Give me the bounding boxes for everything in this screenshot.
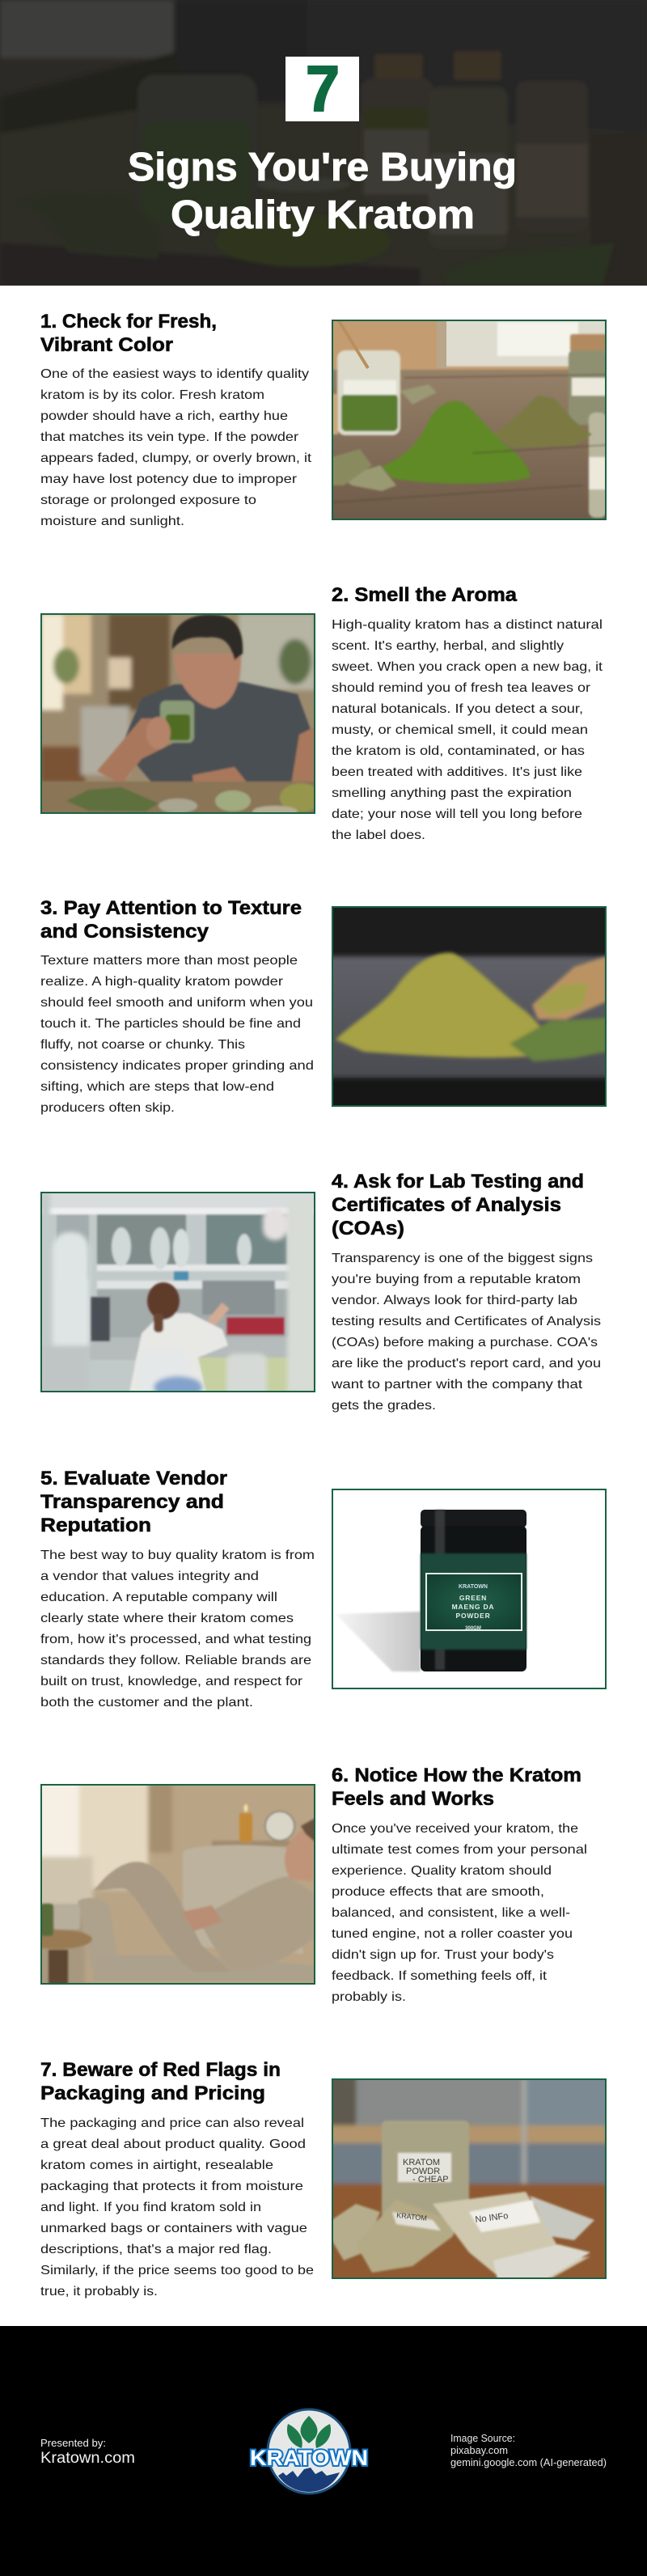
body text 3: consistency indicates proper grinding and (40, 1059, 314, 1073)
body text 2: been treated with additives. It's just like (332, 765, 582, 779)
heading 6: 6. Notice How the Kratom (332, 1765, 581, 1786)
section 4: lab testing (40, 1171, 601, 1413)
body text 1: storage or prolonged exposure to (40, 494, 256, 507)
body text 5: clearly state where their kratom comes (40, 1612, 294, 1625)
body text 1: may have lost potency due to improper (40, 472, 298, 486)
body text 1: appears faded, clumpy, or overly brown, it (40, 451, 312, 465)
heading 6: Feels and Works (332, 1788, 494, 1810)
body text 1: moisture and sunlight. (40, 515, 184, 528)
header background photo (0, 0, 647, 286)
image: cheap kratom bags: POWDR (406, 2167, 440, 2176)
heading 4: Certificates of Analysis (332, 1194, 561, 1216)
body text 7: true, it probably is. (40, 2285, 158, 2298)
body text 7: and light. If you find kratom sold in (40, 2201, 261, 2214)
body text 4: Transparency is one of the biggest signs (332, 1252, 593, 1265)
body text 4: vendor. Always look for third-party lab (332, 1294, 577, 1307)
body text 2: High-quality kratom has a distinct natural (332, 618, 603, 632)
section 6: effects (21, 1765, 587, 2004)
heading 5: Reputation (40, 1515, 151, 1536)
image: product jar: KRATOWN (459, 1584, 488, 1590)
body text 7: packaging that protects it from moisture (40, 2180, 303, 2193)
body text 6: tuned engine, not a roller coaster you (332, 1927, 573, 1941)
header banner (0, 0, 647, 286)
body text 4 (331, 1252, 601, 1413)
logo (250, 2409, 368, 2493)
body text 7: descriptions, that's a major red flag. (40, 2243, 272, 2256)
body text 3 (40, 954, 314, 1115)
image source credits: Image Source: (450, 2432, 515, 2444)
bottles (374, 54, 423, 80)
number badge: 7 (306, 53, 340, 125)
body text 1: powder should have a rich, earthy hue (40, 409, 288, 423)
body text 6 (332, 1822, 587, 2004)
body text 5: The best way to buy quality kratom is from (40, 1549, 315, 1562)
body text 6: probably is. (332, 1990, 406, 2004)
image: laboratory (40, 1192, 315, 1402)
heading 7: Packaging and Pricing (40, 2082, 265, 2104)
heading 3 (40, 897, 302, 943)
heading 5: 5. Evaluate Vendor (40, 1468, 227, 1489)
section 2: smell (40, 584, 603, 842)
body text 7: kratom comes in airtight, resealable (40, 2159, 273, 2172)
presented by: Kratown.com (40, 2450, 135, 2467)
image source credits (450, 2432, 607, 2468)
image source credits: pixabay.com (450, 2444, 508, 2456)
body text 6: balanced, and consistent, like a well- (332, 1906, 570, 1920)
body text 2: the label does. (332, 828, 425, 842)
body text 6: Once you've received your kratom, the (332, 1822, 578, 1836)
body text 4: want to partner with the company that (331, 1378, 583, 1392)
image: product jar: MAENG DA (452, 1603, 494, 1611)
heading 5: Transparency and (40, 1491, 224, 1513)
body text 6: ultimate test comes from your personal (332, 1843, 587, 1857)
body text 4: (COAs) before making a purchase. COA's (332, 1336, 598, 1349)
presented by: Presented by: (40, 2437, 106, 2449)
body text 7: The packaging and price can also reveal (40, 2116, 304, 2130)
jar (137, 74, 257, 224)
body text 4: testing results and Certificates of Analysis (332, 1315, 601, 1328)
heading 4: 4. Ask for Lab Testing and (332, 1171, 584, 1193)
body text 1: One of the easiest ways to identify quality (40, 367, 309, 381)
section 7: red flags (40, 2059, 611, 2298)
heading 1: Vibrant Color (40, 334, 173, 356)
body text 1: kratom is by its color. Fresh kratom (40, 388, 264, 402)
image: product jar: POWDER (455, 1612, 491, 1620)
body text 3: touch it. The particles should be fine and (40, 1017, 301, 1031)
number badge (285, 53, 359, 125)
body text 3: producers often skip. (40, 1101, 175, 1115)
body text 7: a great deal about product quality. Good (40, 2137, 306, 2151)
image: product jar (332, 1489, 607, 1689)
body text 6: didn't sign up for. Trust your body's (332, 1948, 554, 1962)
body text 4: gets the grades. (332, 1399, 436, 1413)
heading 5 (40, 1468, 227, 1536)
body text 2: natural botanicals. If you detect a sour, (332, 702, 583, 716)
body text 6: feedback. If something feels off, it (332, 1969, 548, 1983)
section 3: texture (40, 897, 615, 1115)
logo: KRATOWN (250, 2446, 368, 2470)
heading 1: 1. Check for Fresh, (40, 311, 217, 333)
heading 3: and Consistency (40, 921, 209, 943)
body text 5: from, how it's processed, and what testing (40, 1633, 311, 1646)
image source credits: gemini.google.com (AI-generated) (450, 2456, 607, 2468)
image: cheap kratom bags: KRATOM (403, 2158, 440, 2167)
body text 5: a vendor that values integrity and (40, 1570, 259, 1583)
body text 6: experience. Quality kratom should (332, 1864, 552, 1878)
heading 3: 3. Pay Attention to Texture (40, 897, 302, 919)
body text 4: are like the product's report card, and you (332, 1357, 601, 1371)
body text 2: musty, or chemical smell, it could mean (332, 723, 588, 737)
heading 1 (40, 311, 217, 356)
body text 7: Similarly, if the price seems too good to be (40, 2264, 314, 2277)
heading 7 (40, 2059, 281, 2104)
body text 1: that matches its vein type. If the powder (40, 430, 299, 444)
image: product jar: GREEN (459, 1594, 487, 1602)
image: product jar: 300GM (465, 1626, 481, 1631)
heading 2: 2. Smell the Aroma (332, 584, 518, 606)
title (128, 146, 517, 237)
image: cheap kratom bags: KRATOM (396, 2211, 427, 2222)
image: green powder piles on table (332, 320, 607, 520)
title: Signs You're Buying (128, 146, 517, 189)
body text 2: scent. It's earthy, herbal, and slightly (332, 639, 564, 653)
body text 5: built on trust, knowledge, and respect for (40, 1675, 303, 1688)
body text 3: Texture matters more than most people (40, 954, 298, 968)
body text 2: date; your nose will tell you long before (332, 807, 582, 821)
section 1: check color (40, 311, 607, 528)
heading 4: (COAs) (332, 1218, 404, 1239)
image: cheap kratom bags: - CHEAP (412, 2175, 449, 2184)
title: Quality Kratom (171, 193, 475, 237)
body text 2: sweet. When you crack open a new bag, it (332, 660, 603, 674)
body text 5 (40, 1549, 315, 1710)
body text 3: should feel smooth and uniform when you (40, 996, 313, 1010)
body text 3: sifting, which are steps that low-end (40, 1080, 274, 1094)
body text 4: you're buying from a reputable kratom (332, 1273, 581, 1286)
heading 7: 7. Beware of Red Flags in (40, 2059, 281, 2081)
image: powder on slate (324, 898, 615, 1115)
body text 2 (332, 618, 603, 842)
body text 7: unmarked bags or containers with vague (40, 2222, 307, 2235)
body text 1 (40, 367, 312, 528)
body text 2: smelling anything past the expiration (332, 786, 572, 800)
body text 2: should remind you of fresh tea leaves or (332, 681, 591, 695)
body text 5: education. A reputable company will (40, 1591, 277, 1604)
footer (0, 2326, 647, 2576)
heading 6 (332, 1765, 581, 1810)
body text 2: the kratom is old, contaminated, or has (332, 744, 585, 758)
body text 6: produce effects that are smooth, (332, 1885, 544, 1899)
body text 3: fluffy, not coarse or chunky. This (40, 1038, 245, 1052)
body text 5: standards they follow. Reliable brands are (40, 1654, 311, 1667)
body text 7 (40, 2116, 314, 2298)
image: person resting on couch (21, 1780, 315, 1986)
image: cheap kratom bags: No INFo (475, 2211, 509, 2225)
presented by (40, 2437, 135, 2467)
image: cheap kratom bags (328, 2074, 611, 2285)
body text 3: realize. A high-quality kratom powder (40, 975, 284, 989)
section 5: vendor (40, 1468, 607, 1710)
body text 5: both the customer and the plant. (40, 1696, 253, 1710)
heading 4 (332, 1171, 584, 1239)
image: man smelling jar (40, 613, 322, 817)
